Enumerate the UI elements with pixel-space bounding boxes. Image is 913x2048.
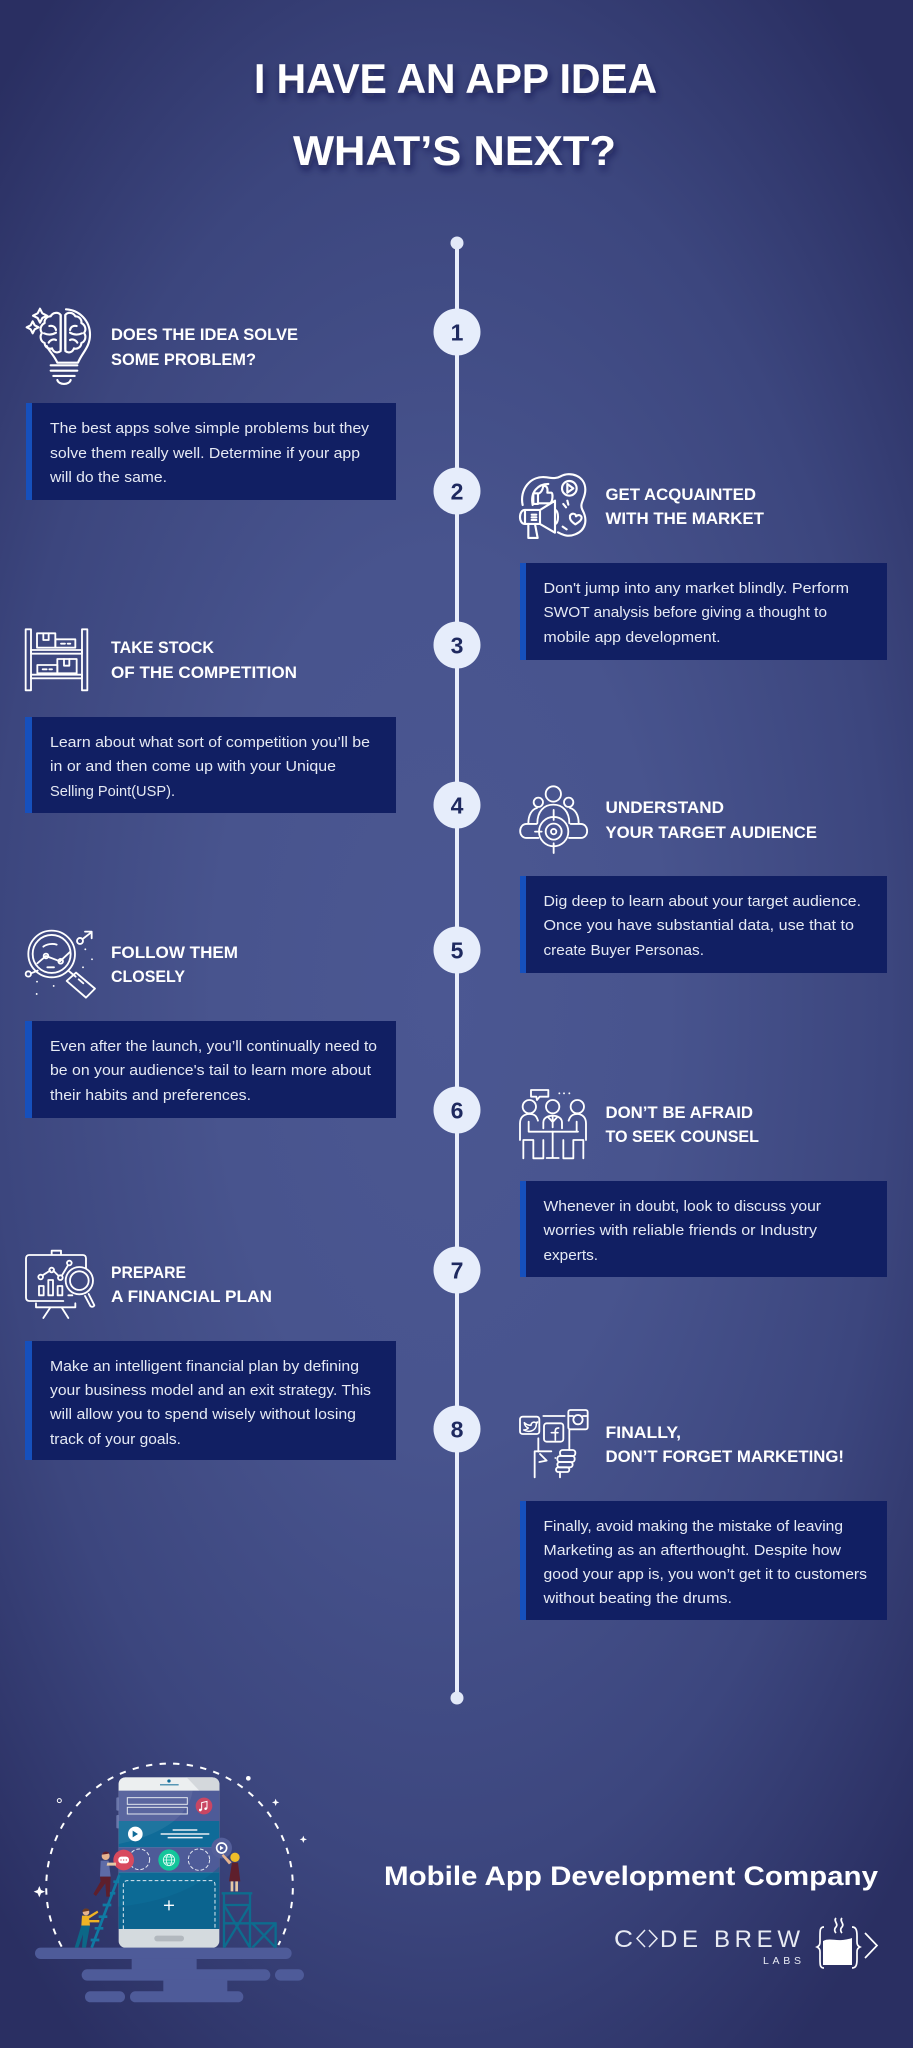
heading xyxy=(111,638,297,682)
heading xyxy=(606,798,817,842)
ladder xyxy=(91,1875,119,1948)
timeline: 6 xyxy=(451,1098,463,1124)
panel text box: SWOT analysis before giving a thought to xyxy=(544,604,827,621)
panel text box: experts. xyxy=(544,1247,598,1264)
panel text box: Once you have substantial data, use that to xyxy=(544,917,854,934)
illustration: phone app being built by people xyxy=(34,1764,307,2002)
heading: DOES THE IDEA SOLVE xyxy=(111,325,298,344)
phone xyxy=(116,1777,219,1948)
panel text box: Even after the launch, you’ll continually need to xyxy=(50,1038,377,1055)
heading: YOUR TARGET AUDIENCE xyxy=(606,823,817,842)
timeline: 5 xyxy=(451,938,464,964)
logo: Code Brew Labs: LABS xyxy=(763,1955,801,1967)
heading xyxy=(606,1103,759,1146)
person on ladder xyxy=(75,1909,99,1948)
icon: stock shelf xyxy=(26,629,87,690)
person on top left xyxy=(93,1852,116,1897)
heading: OF THE COMPETITION xyxy=(111,663,297,682)
panel text box: will allow you to spend wisely without losing xyxy=(49,1406,356,1423)
panel text box: good your app is, you won’t get it to customers xyxy=(544,1566,867,1583)
panel text box: track of your goals. xyxy=(50,1431,181,1448)
timeline: 3 xyxy=(451,632,463,658)
panel text box: mobile app development. xyxy=(544,629,720,646)
panel text box: will do the same. xyxy=(49,469,167,486)
heading: SOME PROBLEM? xyxy=(111,350,256,369)
heading: TO SEEK COUNSEL xyxy=(606,1127,759,1146)
heading xyxy=(606,485,765,528)
logo: Code Brew Labs xyxy=(614,1918,877,1968)
timeline xyxy=(434,236,480,1704)
panel text box: without beating the drums. xyxy=(542,1590,732,1607)
panel text box xyxy=(25,1341,396,1460)
panel text box: Don't jump into any market blindly. Perform xyxy=(544,580,849,597)
panel text box: their habits and preferences. xyxy=(50,1087,251,1104)
heading: TAKE STOCK xyxy=(111,638,215,657)
heading xyxy=(606,1423,844,1466)
panel text box xyxy=(25,1021,396,1118)
panel text box: Make an intelligent financial plan by defining xyxy=(50,1358,359,1375)
panel text box xyxy=(520,1181,887,1277)
icon: hand with social media xyxy=(520,1410,588,1477)
title: WHAT’S NEXT? xyxy=(293,127,616,174)
person on scaffold xyxy=(222,1853,240,1891)
title: I HAVE AN APP IDEA xyxy=(254,55,657,102)
logo: Code Brew Labs: C xyxy=(614,1926,633,1953)
icon: megaphone with social reactions xyxy=(520,474,585,538)
timeline: 8 xyxy=(451,1416,464,1442)
panel text box: Whenever in doubt, look to discuss your xyxy=(544,1198,821,1215)
heading: WITH THE MARKET xyxy=(606,509,765,528)
step 6 xyxy=(520,1090,887,1277)
heading xyxy=(111,1263,272,1306)
panel text box: The best apps solve simple problems but they xyxy=(50,420,370,437)
icon: magnifier analytics xyxy=(26,931,95,998)
panel text box: solve them really well. Determine if your app xyxy=(50,445,360,462)
panel text box: be on your audience's tail to learn more about xyxy=(50,1062,372,1079)
panel text box: Marketing as an afterthought. Despite how xyxy=(544,1542,841,1559)
heading xyxy=(111,943,238,986)
panel text box xyxy=(520,876,887,973)
heading: GET ACQUAINTED xyxy=(606,485,756,504)
icon: financial chart board xyxy=(26,1251,94,1318)
company tagline: Mobile App Development Company xyxy=(384,1861,878,1891)
panel text box: Dig deep to learn about your target audience. xyxy=(544,893,861,910)
timeline: 7 xyxy=(451,1258,463,1284)
panel text box: worries with reliable friends or Industry xyxy=(542,1222,818,1239)
heading: DON’T BE AFRAID xyxy=(606,1103,753,1122)
step 7 xyxy=(25,1251,396,1460)
panel text box xyxy=(520,563,887,660)
panel text box: Learn about what sort of competition you’ll be xyxy=(50,734,370,751)
step 4 xyxy=(520,786,887,973)
dashed arc xyxy=(46,1764,293,1947)
panel text box: your business model and an exit strategy. This xyxy=(50,1382,371,1399)
heading: PREPARE xyxy=(111,1263,186,1282)
panel text box xyxy=(26,403,396,500)
step 2 xyxy=(520,474,887,660)
timeline: 2 xyxy=(451,478,463,504)
heading: CLOSELY xyxy=(111,967,186,986)
platform xyxy=(35,1948,304,2002)
step 8 xyxy=(520,1410,887,1620)
logo icon: coffee cup in braces xyxy=(817,1918,877,1968)
timeline: 4 xyxy=(451,792,464,818)
step 5 xyxy=(25,931,396,1118)
logo: Code Brew Labs: DE BREW xyxy=(660,1926,800,1953)
icon: target audience xyxy=(520,786,587,853)
panel text box: Selling Point(USP). xyxy=(50,783,175,800)
icon: lightbulb brain xyxy=(27,309,90,384)
heading: A FINANCIAL PLAN xyxy=(111,1287,272,1306)
icon: people at counsel table xyxy=(520,1090,586,1158)
heading: UNDERSTAND xyxy=(606,798,724,817)
scaffold xyxy=(222,1893,277,1948)
timeline: 1 xyxy=(451,320,464,346)
panel text box: in or and then come up with your Unique xyxy=(50,758,336,775)
sparkles xyxy=(34,1776,307,1897)
step 1 xyxy=(26,309,396,500)
heading: DON’T FORGET MARKETING! xyxy=(606,1447,844,1466)
panel text box xyxy=(25,717,396,813)
panel text box: create Buyer Personas. xyxy=(544,942,704,959)
heading: FOLLOW THEM xyxy=(111,943,238,962)
phone screen ui xyxy=(113,1798,232,1929)
panel text box xyxy=(520,1501,887,1620)
step 3 xyxy=(25,629,396,813)
heading: FINALLY, xyxy=(606,1423,681,1442)
heading xyxy=(111,325,298,369)
title xyxy=(254,55,657,174)
panel text box: Finally, avoid making the mistake of leaving xyxy=(544,1518,843,1535)
